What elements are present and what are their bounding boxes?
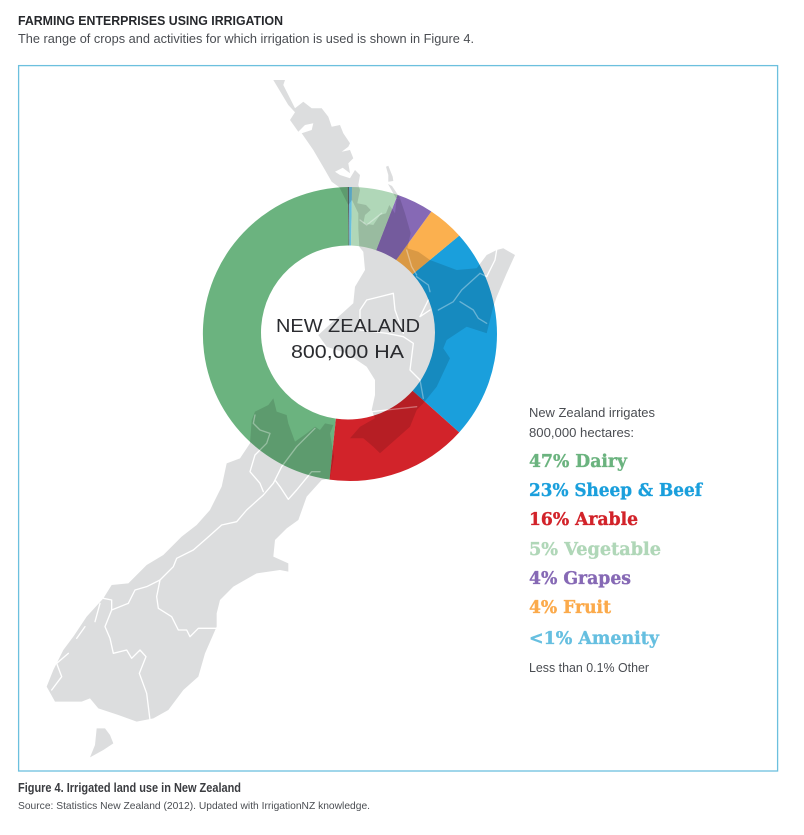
source note: Source: Statistics New Zealand (2012). Updated with IrrigationNZ knowledge. [18, 800, 370, 812]
legend item: grapes: 4% Grapes [529, 569, 631, 589]
segment: other under 0.1% [348, 187, 349, 246]
donut centre label [276, 315, 420, 362]
intro sentence: The range of crops and activities for which irrigation is used is shown in Figure 4. [18, 31, 474, 46]
segment: dairy 47% [203, 187, 348, 480]
land showing through the ring [250, 187, 494, 479]
legend note: other: Less than 0.1% Other [529, 661, 649, 675]
segment: arable 16% [330, 391, 459, 481]
legend item: vegetable: 5% Vegetable [529, 540, 661, 560]
figure caption: Figure 4. Irrigated land use in New Zealand [18, 781, 241, 795]
donut centre label: NEW ZEALAND [276, 315, 420, 336]
segment: vegetable 5% [351, 187, 398, 250]
legend item: arable: 16% Arable [529, 510, 638, 530]
legend [529, 406, 703, 675]
title: FARMING ENTERPRISES USING IRRIGATION [18, 13, 283, 28]
legend intro: 800,000 hectares: [529, 426, 634, 440]
legend item: dairy: 47% Dairy [529, 452, 628, 472]
panel: figure frame [19, 66, 778, 771]
donut centre label: 800,000 HA [291, 341, 405, 362]
segment: amenity under 1% [349, 187, 352, 246]
map: New Zealand [47, 80, 515, 757]
segment: sheep and beef 23% [413, 236, 497, 432]
legend item: amenity: <1% Amenity [529, 629, 660, 649]
legend item: sheep and beef: 23% Sheep & Beef [529, 481, 703, 501]
donut chart: irrigated land use [202, 187, 497, 481]
legend item: fruit: 4% Fruit [529, 598, 611, 618]
legend intro [529, 406, 655, 440]
segment: grapes 4% [376, 195, 431, 260]
segment: fruit 4% [396, 212, 459, 274]
legend intro: New Zealand irrigates [529, 406, 655, 420]
